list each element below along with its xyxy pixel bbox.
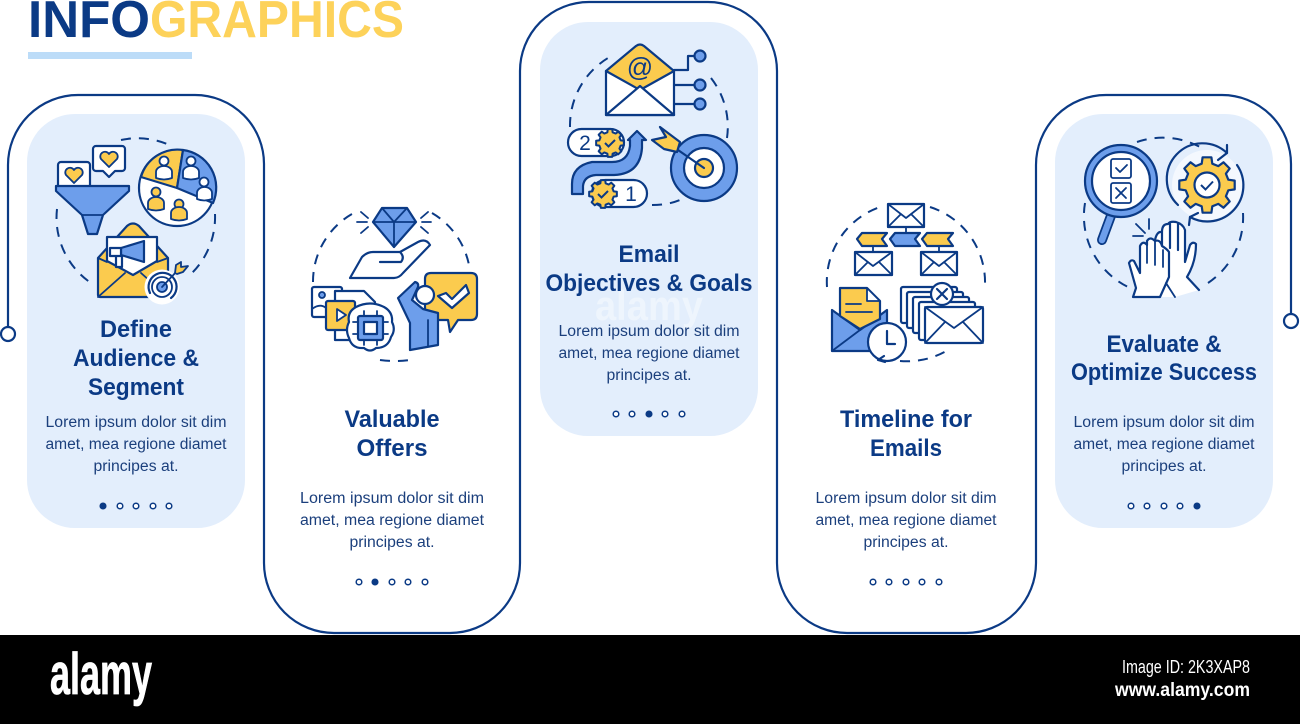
body text: principes at. [864,534,948,551]
heading [344,406,440,462]
body text: amet, mea regione diamet [1074,436,1255,453]
pagination dots [356,579,428,585]
website: www.alamy.com [1114,680,1250,701]
icon: envelope, route and target [568,44,737,208]
body text: Lorem ipsum dolor sit dim [558,323,740,340]
heading [73,316,199,401]
panel: evaluate and optimize success [1055,114,1273,528]
body text [300,490,485,551]
image id: Image ID: 2K3XAP8 [1122,657,1250,677]
heading: Timeline for [840,406,972,433]
panel: define audience and segment [27,114,245,528]
pagination dots [1128,503,1200,509]
title: INFOGRAPHICS [28,0,404,59]
pagination dots [100,503,172,509]
heading [840,406,972,462]
body text [816,490,997,551]
body text [1074,414,1255,475]
icon: funnel, pie chart and envelope [56,138,216,304]
heading: Audience & [73,345,199,372]
heading: Email [618,241,680,268]
body text: Lorem ipsum dolor sit dim [46,414,226,431]
footer bar [0,635,1300,724]
heading: Valuable [344,406,440,433]
heading: Define [100,316,172,343]
heading: Emails [870,435,942,462]
heading [1071,331,1257,386]
icon: envelope, route and target: 1 [625,183,637,206]
icon: diamond, hand, person and media [312,208,477,361]
watermark: alamy [595,282,704,329]
body text: amet, mea regione diamet [46,436,227,453]
body text: amet, mea regione diamet [816,512,997,529]
footer logo: alamy [50,642,152,707]
heading: Objectives & Goals [546,270,752,297]
icon: envelope, route and target: @ [627,52,653,82]
pagination dots [613,411,685,417]
heading: Evaluate & [1106,331,1222,358]
body text [46,414,227,475]
body text: principes at. [350,534,434,551]
body text: Lorem ipsum dolor sit dim [1074,414,1254,431]
body text: amet, mea regione diamet [300,512,485,529]
body text: Lorem ipsum dolor sit dim [300,490,484,507]
heading: Optimize Success [1071,359,1257,386]
body text: amet, mea regione diamet [558,345,740,362]
body text: principes at. [94,458,178,475]
heading: Offers [356,435,428,462]
pagination dots [870,579,942,585]
body text: Lorem ipsum dolor sit dim [816,490,996,507]
heading [546,241,752,297]
panel: email objectives and goals [540,22,758,436]
icon: envelope, route and target: 2 [579,132,591,155]
heading: Segment [88,374,184,401]
body text [558,323,740,384]
panel: timeline for emails [816,204,997,585]
body text: principes at. [606,367,692,384]
body text: principes at. [1122,458,1206,475]
icon: email tree, open envelope, clock and stack [827,204,985,362]
panel: valuable offers [300,208,485,585]
icon: magnifier, gear and high five [1084,138,1243,297]
